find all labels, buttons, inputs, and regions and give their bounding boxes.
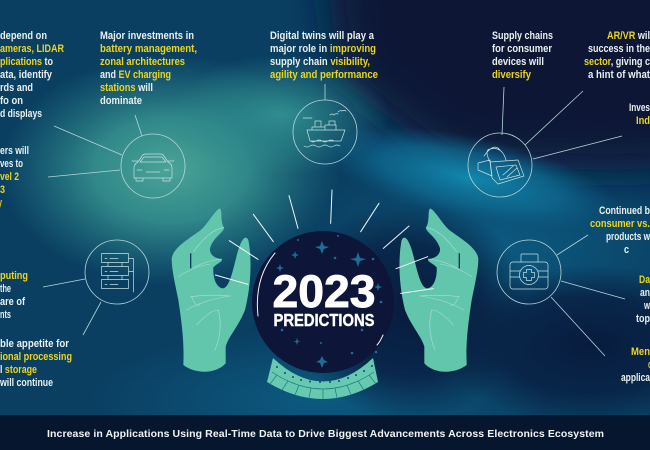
text: vehicle sensors: ameras, LIDAR — [0, 43, 64, 55]
text: data — [636, 274, 650, 325]
text: computational appetite — [0, 338, 72, 389]
footer band: Increase in Applications Using Real-Time Data to Drive Biggest Advancements Across Electronics Ecosystem — [47, 428, 604, 440]
text: consumer vs medical — [590, 205, 650, 256]
ball highlights — [257, 253, 383, 345]
text: computational appetite: ble appetite for — [0, 338, 70, 350]
icon: car with connectors — [48, 115, 185, 198]
text: digital twins: agility and performance — [270, 69, 378, 81]
text: digital twins — [270, 30, 378, 81]
text: computing share: nts — [0, 309, 11, 321]
stars — [276, 235, 382, 368]
text: level 2 and 3 autonomy: 3 — [0, 184, 5, 196]
text: battery investments — [100, 30, 197, 107]
text: battery investments: dominate — [100, 95, 142, 107]
icon: cargo ship with connector — [293, 84, 357, 164]
text: computational appetite: ional processing — [0, 351, 72, 363]
text: supply chains: diversify — [492, 69, 532, 81]
text: level 2 and 3 autonomy — [0, 145, 29, 209]
text: vehicle sensors — [0, 30, 64, 120]
text: digital twins: supply chain visibility, — [270, 56, 370, 68]
text: vehicle sensors: ata, identify — [0, 69, 53, 81]
text: consumer vs medical: c — [624, 244, 629, 256]
text: vehicle sensors: rds and — [0, 82, 33, 94]
text: supply chains — [492, 30, 553, 81]
text: AR/VR — [584, 30, 650, 81]
text: computing share: are of — [0, 296, 25, 308]
text: vehicle sensors: d displays — [0, 108, 42, 120]
footer band — [0, 415, 650, 450]
text: computational appetite: will continue — [0, 377, 53, 389]
text: digital twins: major role in improving — [270, 43, 376, 55]
text: battery investments: and EV charging — [100, 69, 171, 81]
text: battery investments: stations will — [100, 82, 153, 94]
text: computational appetite: l storage — [0, 364, 37, 376]
crystal ball — [252, 231, 394, 373]
icon: VR headset with connectors — [468, 87, 622, 197]
text: battery investments: zonal architectures — [100, 56, 185, 68]
text: computing share: the — [0, 283, 11, 295]
text: level 2 and 3 autonomy: ves to — [0, 158, 23, 170]
icon: medical kit with connectors — [497, 235, 625, 356]
magic rays — [215, 190, 433, 293]
text: battery investments: battery management, — [100, 43, 197, 55]
text: supply chains: devices will — [492, 56, 544, 68]
left hand — [172, 208, 251, 372]
text: battery investments: Major investments in — [100, 30, 194, 42]
text: supply chains: Supply chains — [492, 30, 553, 42]
title: 2023: 2023 — [272, 266, 376, 317]
crystal ball stand — [267, 358, 378, 399]
title: predictions: PREDICTIONS — [274, 310, 374, 330]
text: computing share — [0, 270, 28, 321]
text: level 2 and 3 autonomy: ers will — [0, 145, 29, 157]
text: supply chains: for consumer — [492, 43, 553, 55]
text: vehicle sensors: fo on — [0, 95, 23, 107]
text: investments in industrial — [629, 102, 650, 127]
text: vehicle sensors: depend on — [0, 30, 47, 42]
text: level 2 and 3 autonomy: vel 2 — [0, 171, 19, 183]
right hand — [399, 208, 478, 372]
text: memory — [621, 346, 650, 384]
text: computing share: puting — [0, 270, 28, 282]
text: vehicle sensors: plications to — [0, 56, 53, 68]
icon: server stack with connectors — [43, 240, 149, 335]
text: digital twins: Digital twins will play a — [270, 30, 375, 42]
